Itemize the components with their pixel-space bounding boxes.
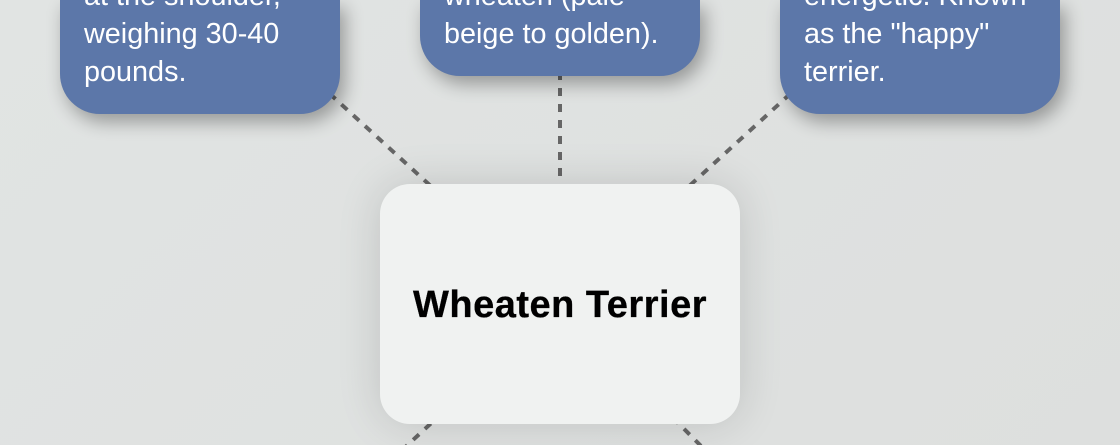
text: temperament: as the "happy" xyxy=(804,18,989,50)
panel: temperament card xyxy=(780,0,1060,114)
text: size: weighing 30-40 xyxy=(84,18,279,50)
panel: size card xyxy=(60,0,340,114)
text: temperament: terrier. xyxy=(804,56,886,88)
heading: Wheaten Terrier: Wheaten Terrier xyxy=(413,284,707,326)
text: size xyxy=(84,0,281,88)
text: temperament xyxy=(804,0,1027,88)
panel: central node xyxy=(380,184,740,424)
text: coat colour: beige to golden). xyxy=(444,18,659,50)
panel: coat colour card xyxy=(420,0,700,76)
text: coat colour xyxy=(444,0,659,50)
text: size: pounds. xyxy=(84,56,186,88)
